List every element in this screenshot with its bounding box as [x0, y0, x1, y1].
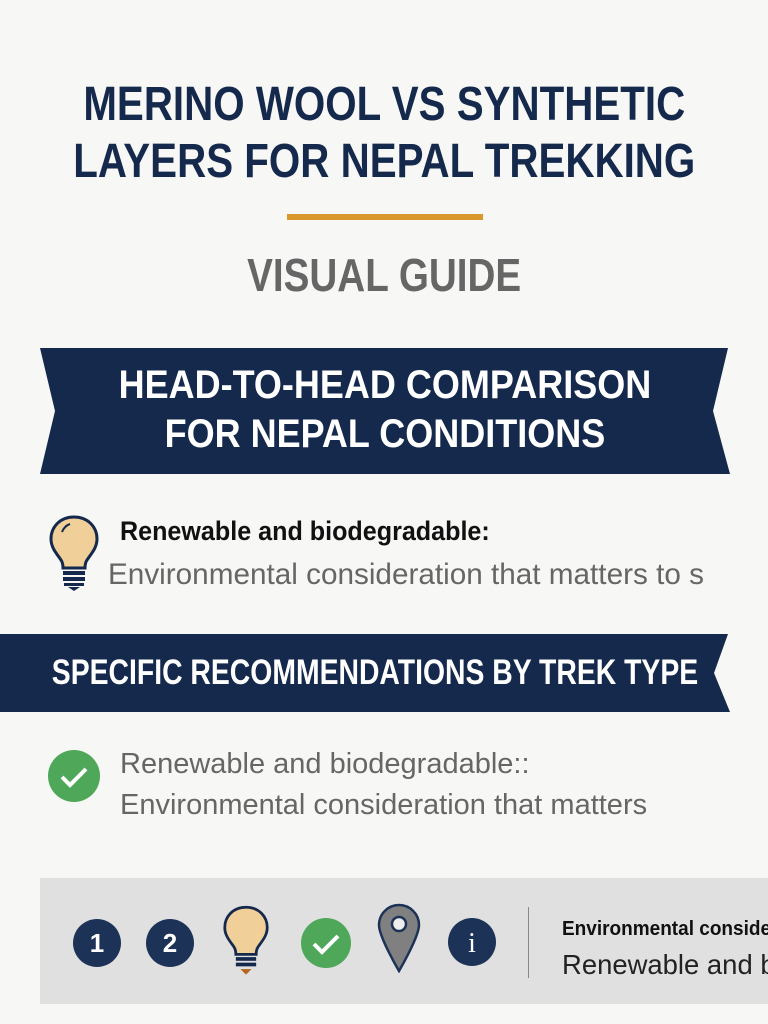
banner: recommendations: SPECIFIC RECOMMENDATIONS BY TREK TYPE — [52, 653, 698, 692]
title: MERINO WOOL VS SYNTHETIC — [83, 78, 685, 131]
icon: info: i — [468, 928, 476, 959]
icon: number 1: 1 — [90, 928, 104, 958]
icon: bulb — [223, 906, 269, 974]
orange divider — [287, 214, 483, 220]
item: lightbulb tip — [50, 516, 704, 591]
item: lightbulb tip: Renewable and biodegradable: — [120, 516, 490, 546]
banner: head-to-head: HEAD-TO-HEAD COMPARISON — [119, 363, 651, 407]
item: check recommendation: Environmental consideration that matters — [120, 789, 647, 821]
footer icon legend panel — [40, 878, 768, 1004]
title: LAYERS FOR NEPAL TREKKING — [73, 135, 695, 188]
icon: map pin — [378, 904, 420, 973]
icon: number 2: 2 — [163, 928, 177, 958]
banner: head-to-head: FOR NEPAL CONDITIONS — [165, 412, 605, 456]
item: check recommendation: Renewable and biodegradable:: — [120, 748, 530, 780]
icon: check — [301, 918, 351, 968]
icon: check — [48, 750, 100, 802]
icon: number 2 — [146, 919, 194, 967]
icon: info — [448, 918, 496, 966]
banner: recommendations — [0, 634, 730, 712]
title — [73, 78, 695, 188]
item: check recommendation — [48, 748, 647, 821]
icon: lightbulb — [50, 516, 98, 591]
icon: number 1 — [73, 919, 121, 967]
banner: head-to-head — [40, 348, 730, 474]
item: lightbulb tip: Environmental consideration that matters to s — [108, 558, 704, 591]
subtitle: VISUAL GUIDE — [247, 249, 521, 301]
